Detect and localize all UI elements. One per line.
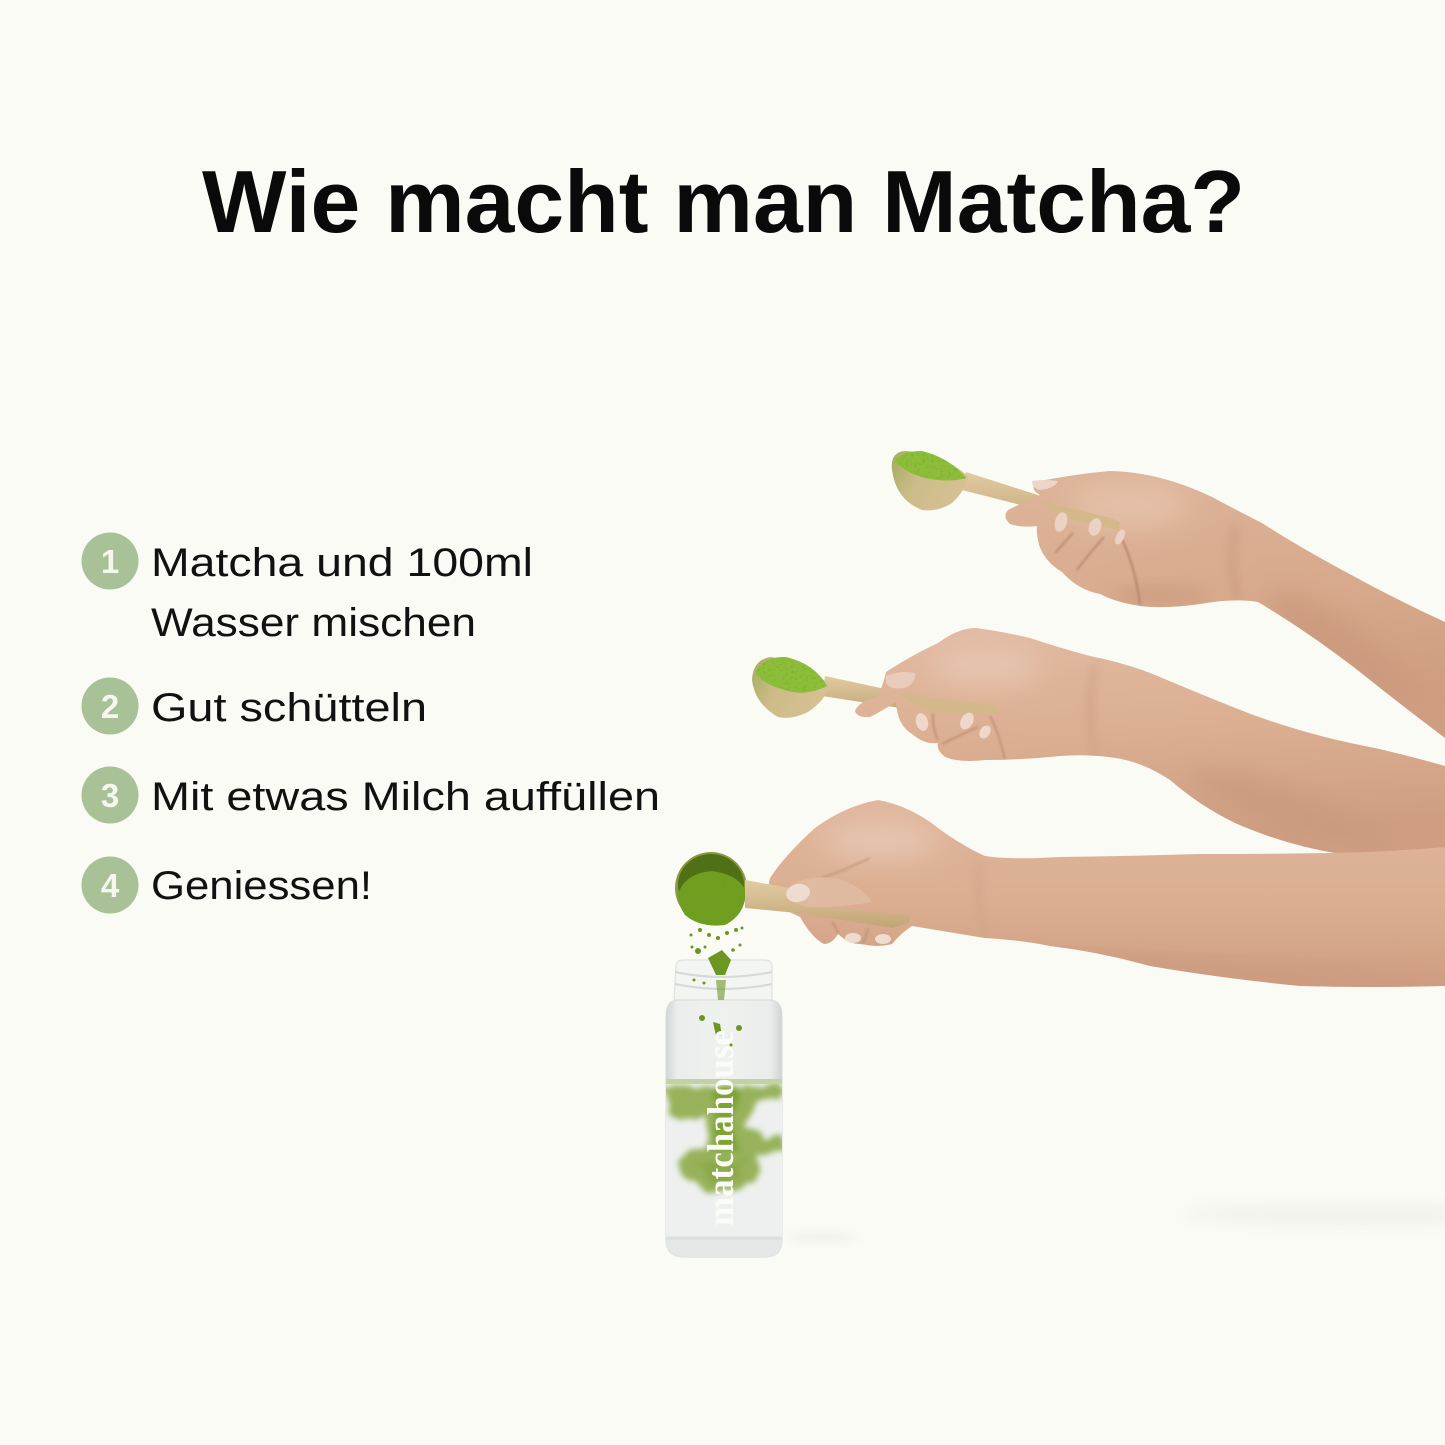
step 3: 3 — [101, 777, 119, 814]
arm shape — [855, 628, 1445, 854]
steps list — [82, 532, 660, 914]
step 1: 1 — [101, 543, 119, 580]
bottom arm pouring spoon — [675, 800, 1445, 994]
step 2 — [82, 678, 427, 734]
arm shape — [1005, 471, 1445, 738]
spoon: top — [892, 451, 1120, 530]
step 3 — [82, 766, 660, 824]
spoon: bottom — [675, 852, 747, 926]
bottle brand text: matchahouse — [701, 1030, 742, 1226]
bottle body — [666, 1000, 782, 1257]
step 2: 2 — [101, 688, 119, 725]
bottle neck — [674, 960, 772, 1000]
top arm holding spoon — [892, 451, 1445, 738]
nails — [1032, 480, 1058, 490]
finger separators — [832, 922, 868, 944]
nails — [784, 882, 812, 904]
middle arm holding spoon — [752, 628, 1445, 863]
step 4: Geniessen! — [151, 864, 372, 908]
water and matcha swirl — [664, 1079, 784, 1257]
bottle shadow — [786, 1234, 858, 1240]
step 2: Gut schütteln — [151, 686, 427, 730]
step 4 — [82, 856, 372, 914]
step 1: Matcha und 100ml — [151, 541, 533, 585]
spoon handle over palm — [1036, 500, 1120, 530]
step 4: 4 — [101, 867, 120, 904]
title: Wie macht man Matcha? — [202, 152, 1245, 251]
floor shadow right — [1180, 1205, 1445, 1223]
thumb — [785, 878, 872, 907]
spoon: middle — [752, 657, 998, 718]
step 1 — [82, 532, 533, 645]
bottle with matcha — [666, 926, 782, 1258]
arm shape — [769, 800, 1445, 987]
step 3: Mit etwas Milch auffüllen — [151, 775, 660, 819]
step 1: Wasser mischen — [151, 601, 476, 645]
handle over palm — [895, 693, 998, 714]
spoon handle — [745, 880, 910, 928]
nails — [886, 672, 915, 688]
falling powder — [690, 926, 744, 1046]
